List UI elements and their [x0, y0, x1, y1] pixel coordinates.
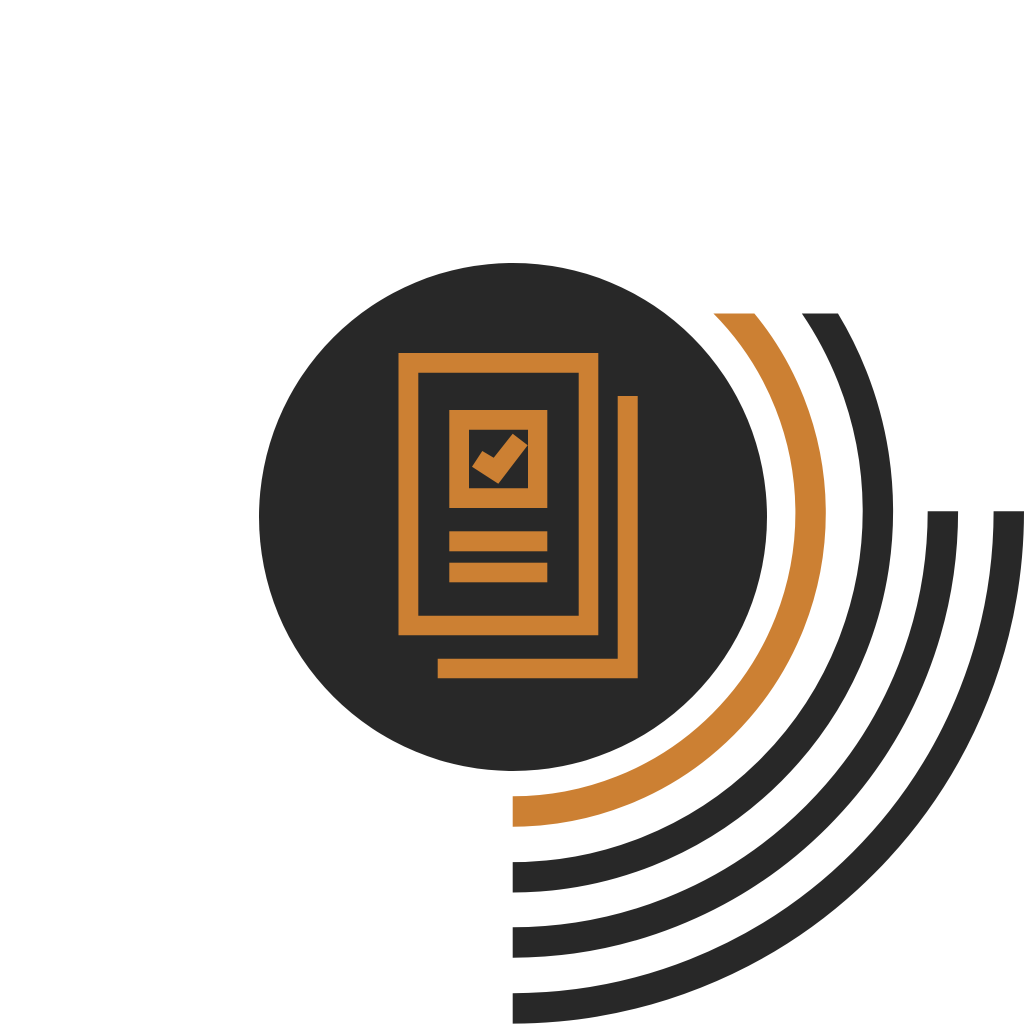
- arc: orange ring: [512, 314, 826, 827]
- icon: front document frame: [398, 353, 598, 635]
- infographic canvas: [259, 263, 1024, 1024]
- dark circle badge: [259, 263, 767, 771]
- icon: text line two: [449, 563, 547, 582]
- arc: dark ring one: [512, 314, 894, 892]
- icon: checkbox frame: [449, 410, 547, 508]
- outer dark arcs: [513, 511, 1009, 1008]
- arc: dark ring two: [513, 511, 943, 942]
- clipped inner arcs: [512, 314, 894, 892]
- icon: documents with checkmark: [398, 353, 638, 678]
- icon: text line one: [449, 531, 547, 551]
- icon: checkmark: [472, 434, 528, 484]
- arc: dark ring three: [513, 511, 1009, 1008]
- icon: back document corner: [438, 396, 638, 678]
